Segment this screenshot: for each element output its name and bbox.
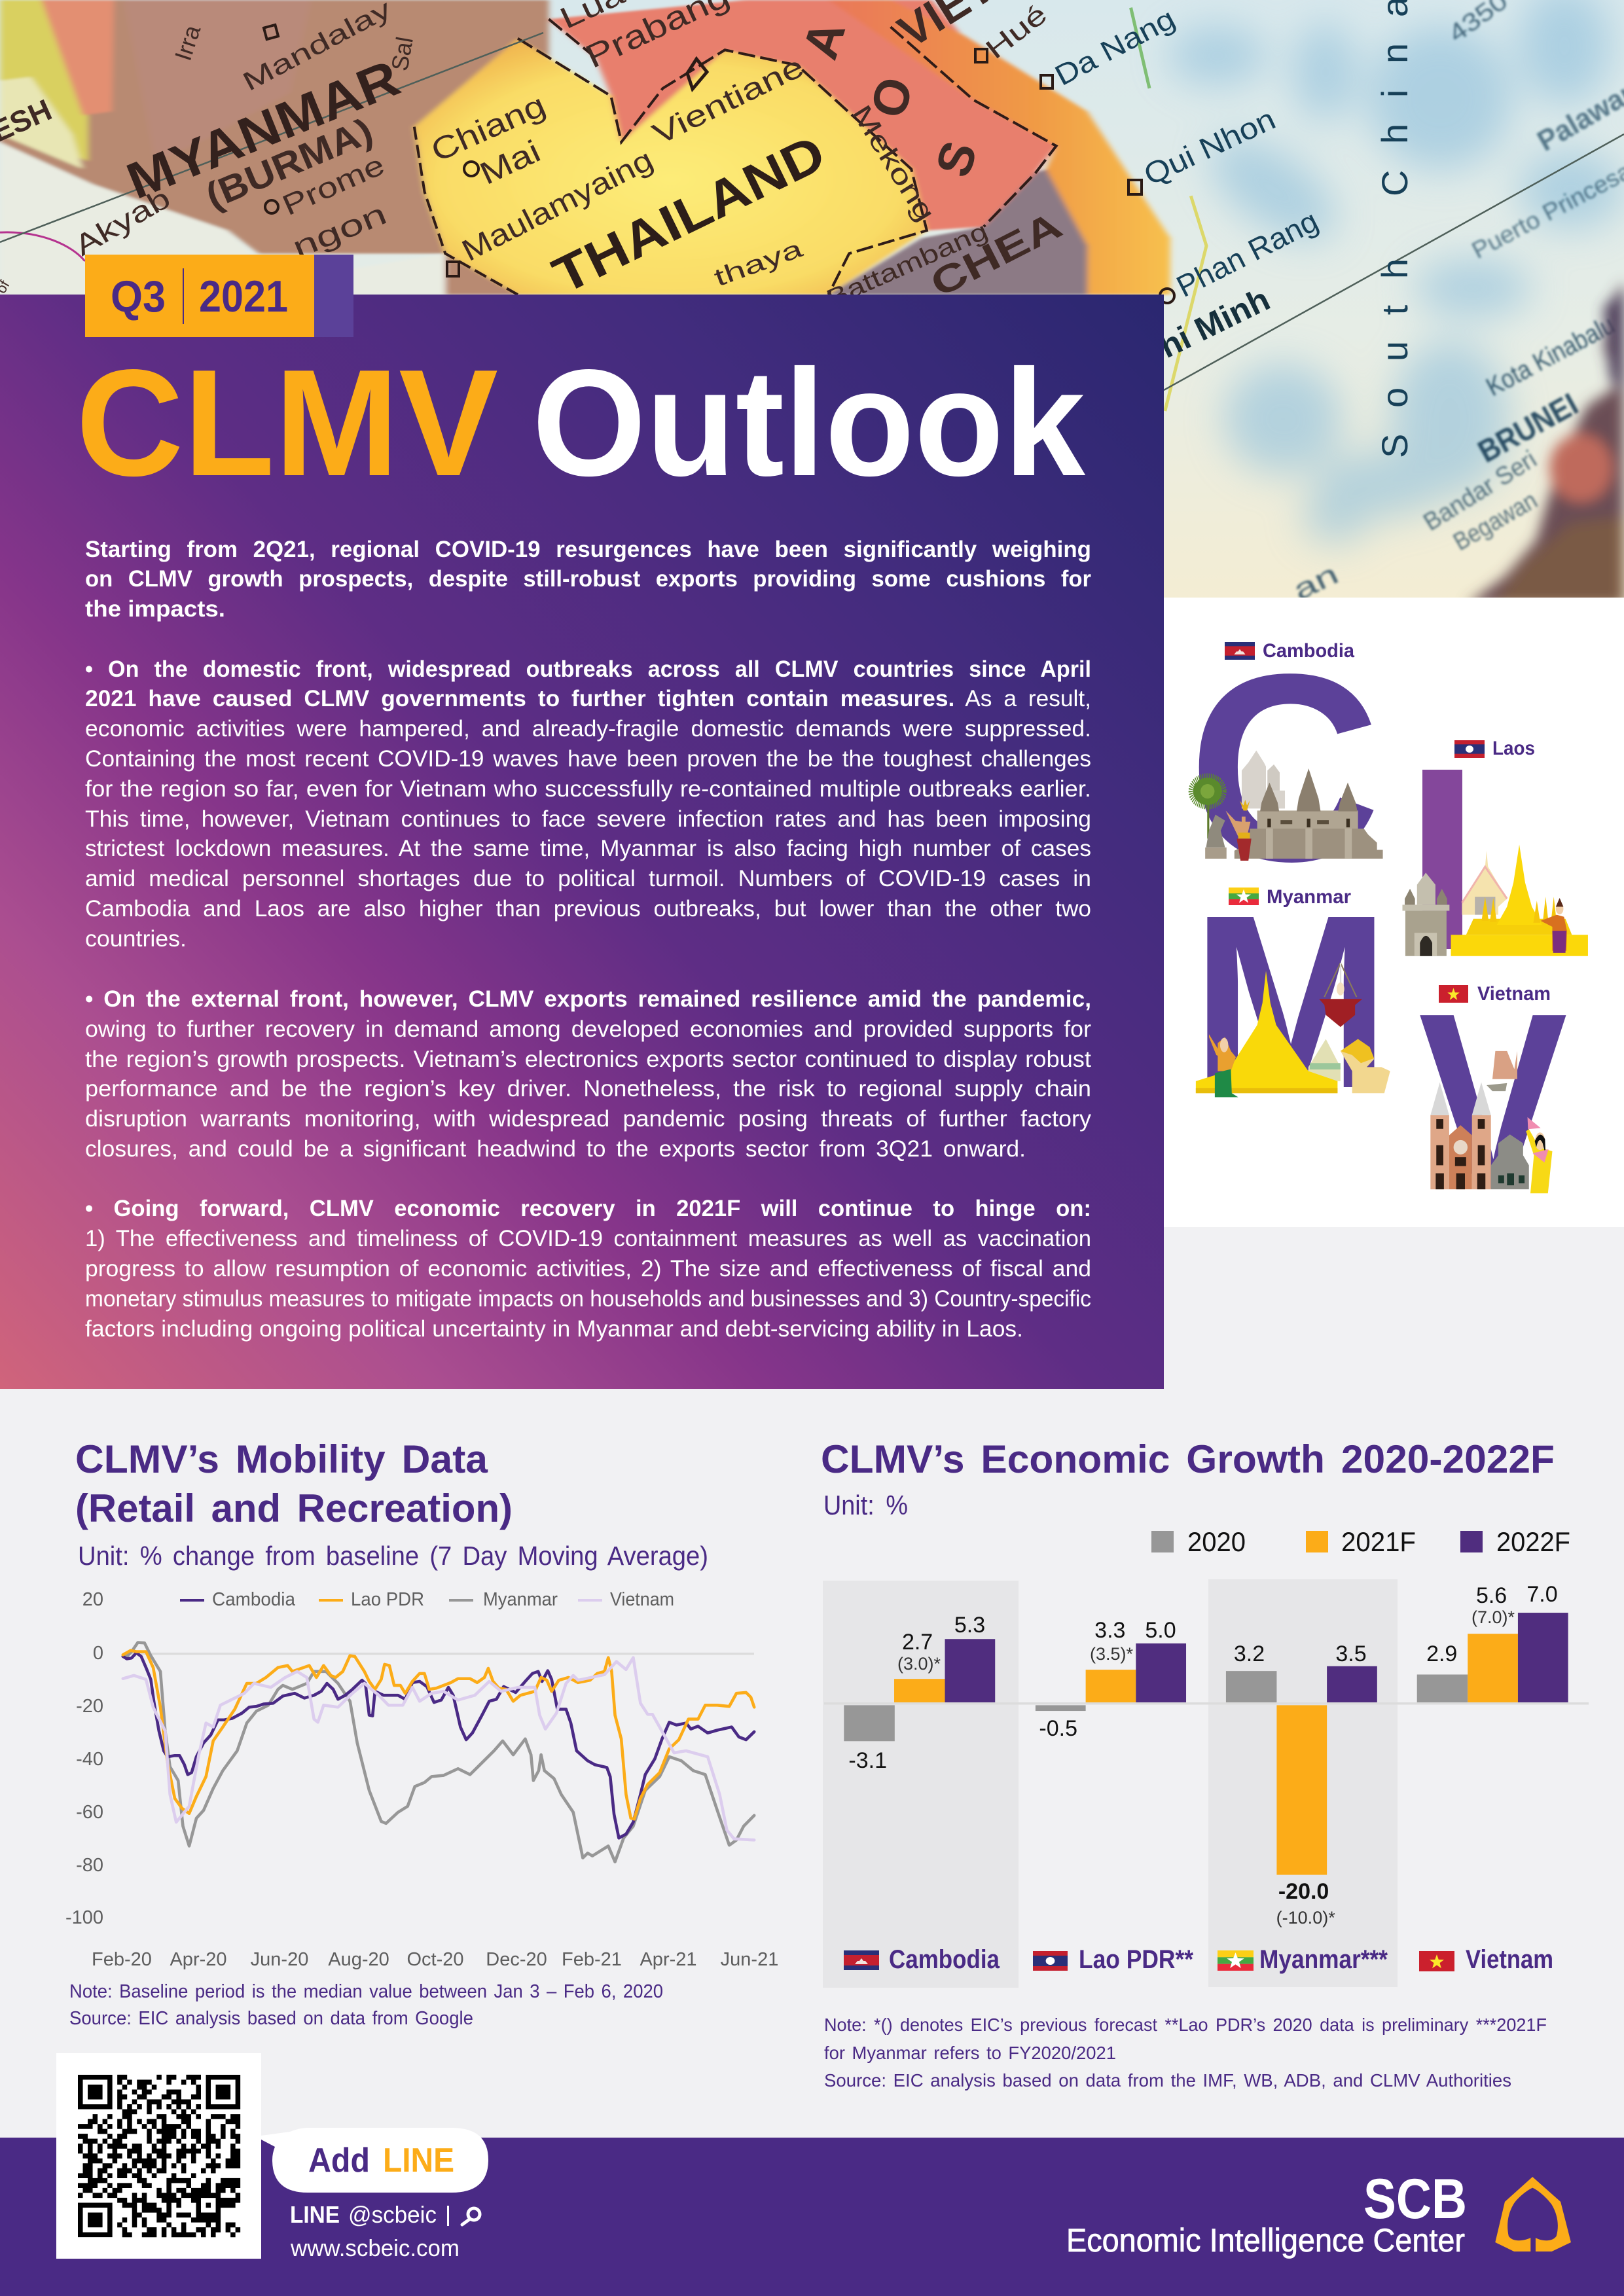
series: Myanmar — [123, 1643, 754, 1862]
value labels: (3.0)* — [897, 1654, 941, 1674]
line chart: mobility — [65, 1589, 778, 1970]
blurred far-right labels: Bandar Seri — [1419, 446, 1542, 537]
Borneo land — [1466, 281, 1624, 605]
text block: external front: the region’s growth prospects. Vietnam’s electronics exports sector continued to display robust — [85, 1047, 1091, 1072]
place names: Maulamyaing — [456, 142, 659, 268]
country letter: Cambodia: Cambodia — [1263, 640, 1354, 662]
note: growth chart: Source: EIC analysis based on data from the IMF, WB, ADB, and CLMV Authorities — [824, 2070, 1511, 2090]
contact details: @scbeic — [348, 2201, 437, 2228]
value labels: (7.0)* — [1471, 1607, 1515, 1627]
legend: growth chart: 2021F — [1341, 1526, 1416, 1557]
place names: A — [792, 14, 856, 65]
series: Lao PDR — [123, 1651, 754, 1819]
x axis labels: Jun-20 — [251, 1949, 308, 1970]
text block: going forward: factors including ongoing political uncertainty in Myanmar and debt-servicing ability in Laos. — [85, 1316, 1023, 1342]
heading: mobility data: CLMV’s Mobility Data — [75, 1437, 488, 1481]
text block: domestic front: • On the domestic front, widespread outbreaks across all CLMV countries since April — [85, 656, 1091, 682]
text block: domestic front: Containing the most recent COVID-19 waves have been proven the be the toughest challenges — [85, 746, 1091, 772]
place names: thaya — [711, 235, 807, 292]
note: mobility chart — [69, 1981, 663, 2029]
text block: introduction: on CLMV growth prospects, despite still-robust exports providing some cushions for — [85, 566, 1091, 592]
value labels: 5.0 — [1145, 1618, 1176, 1643]
value labels: 7.0 — [1526, 1582, 1558, 1607]
text block: going forward: monetary stimulus measures to mitigate impacts on households and businesses and 3) Country-specific — [85, 1286, 1091, 1312]
place names: Battambang — [823, 217, 992, 313]
map borders and rivers — [0, 8, 1206, 411]
logo text: SCB Economic Intelligence Center: Economic Intelligence Center — [1066, 2222, 1465, 2259]
text block: external front: owing to further recovery in demand among developed economies and provided supports for — [85, 1016, 1091, 1042]
country letter: Vietnam: Vietnam — [1477, 983, 1551, 1005]
date tag — [85, 255, 353, 337]
text block: introduction — [85, 537, 1091, 622]
place names: hi Minh — [1153, 281, 1276, 365]
text block: external front: closures, and could be a significant headwind to the exports sector from 3Q21 onward. — [85, 1136, 1026, 1162]
x axis labels: Jun-21 — [721, 1949, 778, 1970]
note: mobility chart: Source: EIC analysis based on data from Google — [69, 2008, 473, 2029]
text block: going forward: progress to allow resumption of economic activities, 2) The size and effectiveness of fiscal and — [85, 1256, 1091, 1282]
heading: economic growth: CLMV’s Economic Growth 2020-2022F — [821, 1437, 1555, 1481]
place names: (BURMA) — [200, 110, 378, 217]
place names: Qui Nhon — [1138, 101, 1280, 192]
place names: Mekong — [846, 99, 941, 226]
place names: MYANMAR — [118, 48, 407, 210]
title — [76, 338, 1086, 508]
text block: domestic front — [85, 656, 1091, 952]
x axis labels: Dec-20 — [486, 1949, 547, 1970]
place names: Irra — [170, 22, 206, 63]
map city markers — [264, 25, 1174, 303]
panel: main gradient panel — [0, 295, 1164, 1389]
text block: going forward: • Going forward, CLMV economic recovery in 2021F will continue to hinge on: — [85, 1196, 1091, 1221]
y axis labels — [65, 1589, 103, 1928]
place names: Mai — [475, 134, 546, 192]
text block: domestic front: for the region so far, even for Vietnam who successfully re-contained multiple outbreaks earlier. — [85, 776, 1091, 802]
y axis labels: -40 — [76, 1749, 103, 1770]
place names: Phan Rang — [1171, 204, 1324, 304]
y axis labels: -20 — [76, 1696, 103, 1717]
blurred far-right labels — [1288, 0, 1624, 607]
text block: domestic front: amid medical personnel shortages due to political turmoil. Numbers of COVID-19 cases in — [85, 866, 1091, 891]
text block: external front: disruption warrants monitoring, with widespread pandemic posing threats of further factory — [85, 1106, 1092, 1132]
text block: external front — [85, 986, 1092, 1162]
date tag: 2021 — [199, 272, 288, 321]
x axis labels: Oct-20 — [406, 1949, 464, 1970]
chart legend — [180, 1589, 674, 1610]
blurred far-right labels: an — [1288, 558, 1343, 607]
callout: Add LINE bubble: LINE — [383, 2142, 454, 2179]
heading: mobility data — [75, 1437, 513, 1530]
logo text: SCB Economic Intelligence Center: SCB — [1363, 2168, 1467, 2231]
place names: THAILAND — [544, 124, 834, 304]
value labels: 2.7 — [902, 1630, 933, 1655]
map photo background — [0, 0, 1624, 607]
place names: Prome — [278, 149, 389, 222]
QR code — [56, 2053, 261, 2259]
x axis labels: Aug-20 — [328, 1949, 389, 1970]
legend: growth chart: 2020 — [1187, 1526, 1246, 1557]
note: mobility chart: Note: Baseline period is the median value between Jan 3 – Feb 6, 2020 — [69, 1981, 663, 2002]
place names: South China — [1374, 0, 1415, 458]
country labels: Myanmar*** — [1259, 1945, 1388, 1974]
x axis labels: Feb-20 — [92, 1949, 152, 1970]
country letter: Myanmar: Myanmar — [1267, 886, 1351, 908]
y axis labels: 20 — [82, 1589, 103, 1610]
text block: domestic front: economic activities were hampered, and already-fragile domestic demands were suppressed. — [85, 716, 1091, 742]
text: growth unit: Unit: % — [823, 1490, 908, 1520]
x axis labels: Feb-21 — [562, 1949, 622, 1970]
bar chart: economic growth — [823, 1579, 1589, 1988]
value labels: -20.0 — [1278, 1879, 1329, 1904]
text block: external front: performance and be the region’s key driver. Nonetheless, the risk to regional supply chain — [85, 1076, 1091, 1102]
logo text: SCB Economic Intelligence Center — [1066, 2168, 1467, 2259]
country labels — [844, 1945, 1553, 1974]
country labels: Lao PDR** — [1079, 1945, 1193, 1974]
y axis labels: -60 — [76, 1802, 103, 1823]
chart legend: Vietnam — [610, 1589, 674, 1610]
value labels: 5.3 — [954, 1613, 985, 1638]
icon: SCB logo — [1495, 2177, 1571, 2251]
icon: search — [462, 2208, 480, 2225]
bars: Lao PDR — [1036, 1643, 1186, 1711]
series: Cambodia — [123, 1653, 754, 1838]
country letter: Cambodia: C — [1188, 619, 1381, 917]
country letter: Myanmar: M — [1191, 863, 1390, 1139]
blurred far-right labels: Puerto Princesa — [1468, 157, 1624, 264]
text block: introduction: Starting from 2Q21, regional COVID-19 resurgences have been significantly weighing — [85, 537, 1091, 562]
place names: CHEA — [924, 204, 1068, 306]
title: Outlook — [532, 338, 1086, 508]
note: growth chart: Note: *() denotes EIC’s previous forecast **Lao PDR’s 2020 data is preliminary ***2021F — [824, 2015, 1547, 2035]
place names: Chiang — [426, 88, 550, 169]
x axis labels — [92, 1949, 778, 1970]
value labels: -0.5 — [1039, 1716, 1077, 1741]
place names: ngon — [287, 196, 391, 264]
place names: Sal — [386, 35, 418, 73]
country letter: Vietnam: V — [1418, 961, 1568, 1243]
y axis labels: 0 — [93, 1643, 103, 1664]
note: growth chart — [824, 2015, 1547, 2090]
bars: Myanmar — [1226, 1666, 1377, 1875]
value labels: (-10.0)* — [1276, 1908, 1335, 1928]
title: CLMV — [76, 338, 498, 508]
chart legend: Cambodia — [212, 1589, 296, 1610]
place names: Vientiane — [647, 49, 809, 151]
land masses — [0, 0, 1170, 295]
panel: white country panel — [1164, 598, 1624, 1227]
value labels: 5.6 — [1476, 1583, 1507, 1608]
blurred far-right labels: Begawan — [1449, 486, 1542, 556]
text block: domestic front: strictest lockdown measures. At the same time, Myanmar is also facing high number of cases — [85, 836, 1091, 861]
sea shading patches — [1168, 0, 1623, 543]
value labels — [848, 1582, 1558, 1928]
date tag: Q3 — [111, 272, 166, 321]
contact details: www.scbeic.com — [290, 2234, 460, 2261]
callout: Add LINE bubble — [261, 2128, 488, 2193]
country letter: Laos: Laos — [1492, 738, 1535, 759]
place names: O — [859, 71, 924, 124]
text block: going forward — [85, 1196, 1091, 1342]
place names: Hué — [980, 0, 1053, 65]
heading: mobility data: (Retail and Recreation) — [75, 1486, 513, 1530]
place names: Akyab — [69, 182, 176, 262]
place names: Da Nang — [1050, 3, 1180, 92]
value labels: 2.9 — [1426, 1641, 1457, 1666]
blurred far-right labels: BRUNEI — [1473, 387, 1584, 470]
x axis labels: Apr-21 — [640, 1949, 697, 1970]
series: Vietnam — [123, 1658, 754, 1840]
text block: domestic front: countries. — [85, 926, 187, 952]
x axis labels: Apr-20 — [170, 1949, 227, 1970]
place names: S — [925, 135, 988, 183]
country labels: Cambodia — [889, 1945, 1000, 1974]
place names: Mandalay — [238, 0, 396, 97]
footer band — [0, 2138, 1624, 2296]
value labels: 3.2 — [1234, 1641, 1265, 1666]
contact details — [290, 2201, 460, 2261]
text block: domestic front: This time, however, Vietnam continues to face severe infection rates and has been imposing — [85, 806, 1091, 832]
text block: domestic front: Cambodia and Laos are also higher than previous outbreaks, but lower than the other two — [85, 896, 1091, 922]
text: mobility unit: Unit: % change from baseline (7 Day Moving Average) — [78, 1541, 708, 1571]
legend: growth chart: 2022F — [1496, 1526, 1570, 1557]
value labels: 3.3 — [1094, 1618, 1125, 1643]
bars: Vietnam — [1417, 1613, 1568, 1703]
y axis labels: -100 — [65, 1907, 103, 1928]
value labels: (3.5)* — [1090, 1644, 1134, 1664]
chart legend: Myanmar — [483, 1589, 558, 1610]
value labels: 3.5 — [1335, 1641, 1367, 1666]
text block: going forward: 1) The effectiveness and timeliness of COVID-19 containment measures as well as vaccination — [85, 1226, 1091, 1251]
contact details: LINE — [290, 2201, 340, 2228]
note: growth chart: for Myanmar refers to FY2020/2021 — [824, 2043, 1116, 2063]
y axis labels: -80 — [76, 1855, 103, 1876]
bars: Cambodia — [844, 1639, 995, 1741]
chart legend: Lao PDR — [351, 1589, 424, 1610]
place names — [0, 0, 1415, 458]
text block: external front: • On the external front, however, CLMV exports remained resilience amid the pandemic, — [85, 986, 1091, 1012]
latitude line — [0, 33, 1624, 390]
callout: Add LINE bubble: Add — [308, 2142, 370, 2179]
legend: growth chart — [1151, 1526, 1570, 1557]
text block: introduction: the impacts. — [85, 596, 225, 622]
country letter: Laos — [1402, 738, 1588, 956]
text block: domestic front: 2021 have caused CLMV governments to further tighten contain measures. As a result, — [85, 686, 1091, 711]
value labels: -3.1 — [848, 1748, 887, 1773]
country labels: Vietnam — [1466, 1945, 1553, 1974]
